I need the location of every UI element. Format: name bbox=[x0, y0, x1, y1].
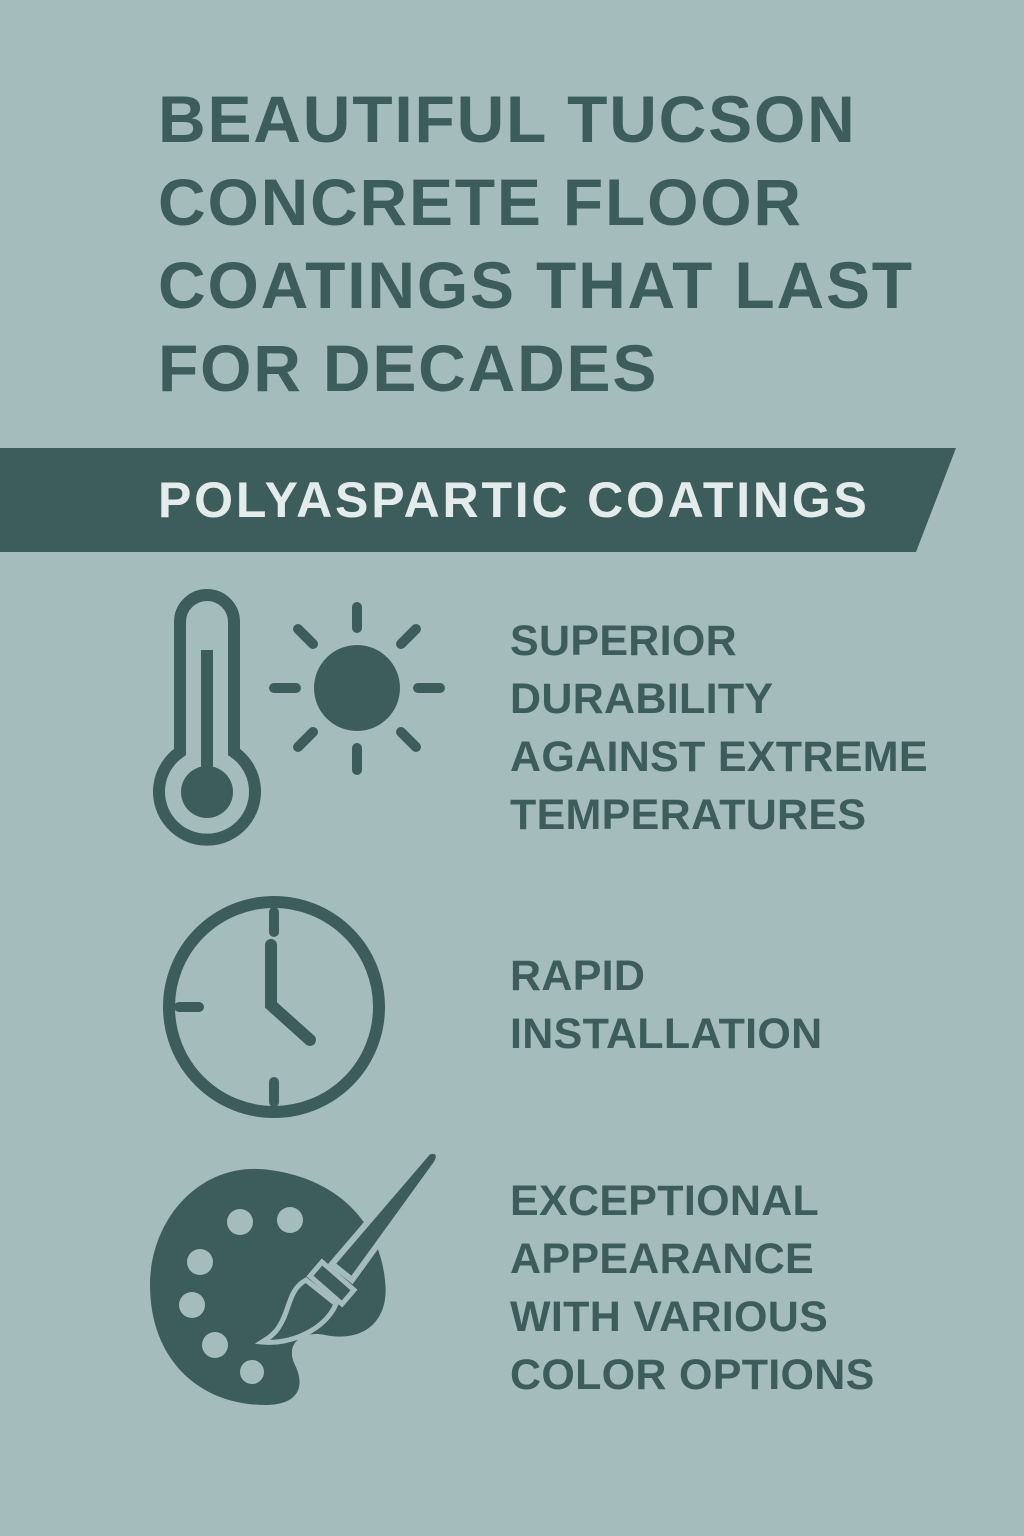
banner text: POLYASPARTIC COATINGS bbox=[158, 472, 870, 528]
title: CONCRETE FLOOR bbox=[158, 165, 803, 239]
feature text: appearance: EXCEPTIONAL bbox=[510, 1177, 819, 1225]
feature text: durability bbox=[510, 617, 928, 839]
feature text: durability: SUPERIOR bbox=[510, 617, 737, 665]
feature text: rapid installation: INSTALLATION bbox=[510, 1010, 823, 1058]
feature text: appearance: COLOR OPTIONS bbox=[510, 1351, 875, 1399]
title bbox=[158, 82, 914, 405]
feature text: rapid installation bbox=[510, 952, 823, 1058]
feature text: appearance: WITH VARIOUS bbox=[510, 1293, 828, 1341]
title: COATINGS THAT LAST bbox=[158, 248, 914, 322]
feature text: appearance: APPEARANCE bbox=[510, 1235, 814, 1283]
icon: thermometer and sun bbox=[153, 589, 445, 846]
feature text: durability: TEMPERATURES bbox=[510, 791, 866, 839]
feature text: durability: AGAINST EXTREME bbox=[510, 733, 928, 781]
icon: palette and brush bbox=[150, 1154, 436, 1405]
banner bbox=[0, 448, 956, 552]
feature text: durability: DURABILITY bbox=[510, 675, 773, 723]
title: FOR DECADES bbox=[158, 331, 658, 405]
icon: clock bbox=[163, 896, 385, 1118]
feature text: rapid installation: RAPID bbox=[510, 952, 645, 1000]
feature text: appearance bbox=[510, 1177, 875, 1399]
title: BEAUTIFUL TUCSON bbox=[158, 82, 857, 156]
